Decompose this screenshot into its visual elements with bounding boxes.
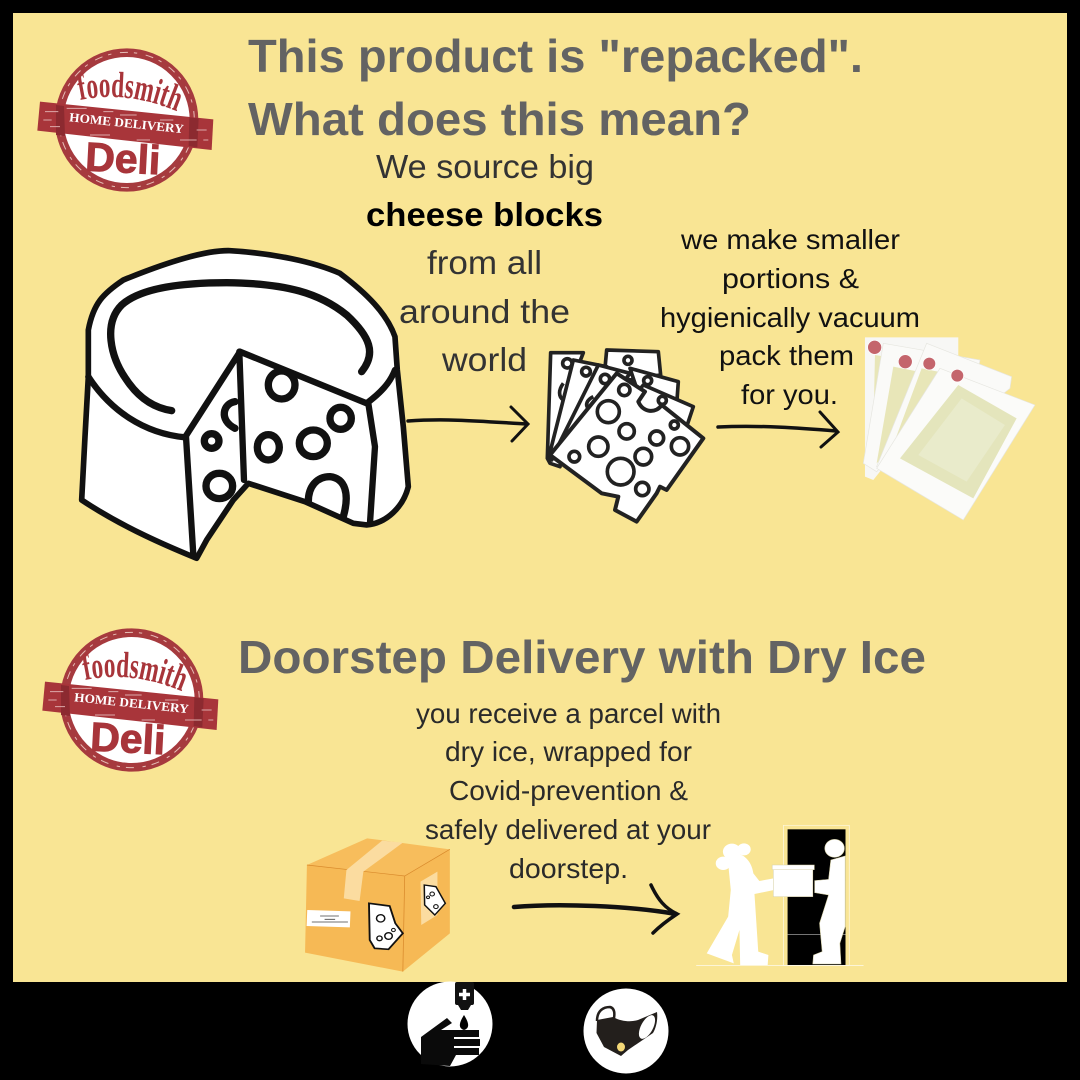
text: source cheese blocks: from all — [427, 244, 542, 281]
image: vacuum packs — [863, 337, 1035, 520]
text: smaller portions: hygienically vacuum — [660, 302, 920, 333]
logo: Foodsmith top: HOME DELIVERY — [69, 110, 184, 136]
logo: Foodsmith top: Deli — [84, 134, 162, 183]
arrow: cheese to slices — [408, 407, 528, 441]
icon: hand sanitizer — [408, 982, 492, 1066]
text: smaller portions: portions & — [722, 263, 859, 294]
text: source cheese blocks: around the — [399, 293, 570, 330]
text: source cheese blocks: cheese blocks — [366, 196, 603, 233]
logo: Foodsmith bottom: foodsmith — [82, 652, 186, 692]
person: customer — [707, 843, 790, 965]
arrow: slices to packs — [718, 412, 838, 447]
text: parcel description: dry ice, wrapped for — [445, 736, 692, 767]
heading: doorstep delivery: Doorstep Delivery with Dry Ice — [238, 631, 926, 683]
icon: cheese wheel — [82, 251, 408, 558]
illustration: delivery at door — [696, 825, 864, 965]
text: smaller portions: for you. — [741, 379, 838, 410]
icon: parcel box — [305, 838, 450, 972]
text: parcel description — [416, 698, 721, 884]
text: source cheese blocks: world — [441, 341, 527, 378]
logo: Foodsmith bottom — [42, 628, 218, 772]
logo: Foodsmith top — [37, 48, 214, 192]
logo: Foodsmith bottom: HOME DELIVERY — [74, 690, 189, 716]
title: repacked: What does this mean? — [248, 93, 751, 145]
logo: Foodsmith top: foodsmith — [77, 72, 181, 112]
text: source cheese blocks — [366, 148, 603, 378]
title: repacked — [248, 30, 863, 145]
text: smaller portions: pack them — [719, 340, 854, 371]
text: parcel description: you receive a parcel with — [416, 698, 721, 729]
text: smaller portions — [660, 224, 920, 410]
text: smaller portions: we make smaller — [680, 224, 900, 255]
title: repacked: This product is "repacked". — [248, 30, 863, 82]
icon: cheese slices — [547, 350, 703, 522]
arrow: parcel to door — [514, 885, 677, 933]
person: courier — [772, 839, 845, 964]
text: parcel description: doorstep. — [509, 853, 628, 884]
text: source cheese blocks: We source big — [376, 148, 594, 185]
text: parcel description: Covid-prevention & — [449, 775, 688, 806]
text: parcel description: safely delivered at your — [425, 814, 711, 845]
logo: Foodsmith bottom: Deli — [89, 714, 167, 763]
icon: face mask — [584, 988, 668, 1074]
